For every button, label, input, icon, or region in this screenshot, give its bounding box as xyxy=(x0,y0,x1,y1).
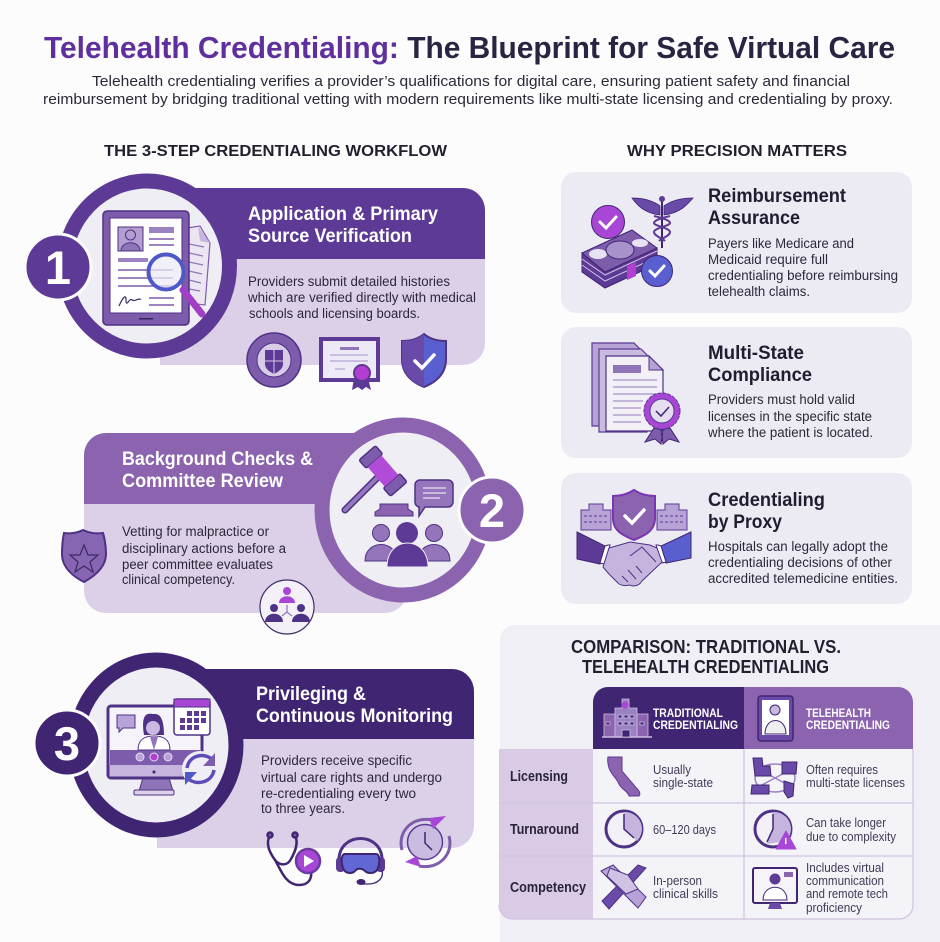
icon: network of people xyxy=(260,580,314,634)
heading: workflow: THE 3-STEP CREDENTIALING WORKFLOW xyxy=(104,143,448,160)
icon: speech bubble xyxy=(415,480,453,516)
heading: Compliance xyxy=(708,364,812,386)
cell: includes virtual: Includes virtual xyxy=(806,861,884,875)
step 3 ring xyxy=(76,660,236,830)
description: telehealth claims. xyxy=(708,284,810,299)
step 1 number: 1 xyxy=(45,241,71,294)
heading xyxy=(708,342,812,386)
cell: single state: Usually xyxy=(653,763,692,777)
step 2 text: disciplinary actions before a xyxy=(122,541,286,556)
table rows background xyxy=(593,749,913,919)
icon: shield, hospitals and handshake xyxy=(577,490,691,586)
traditional header xyxy=(593,687,744,749)
step 3 text: Providers receive specific xyxy=(261,753,412,768)
comparison heading xyxy=(571,637,841,677)
step 1 heading xyxy=(248,203,438,247)
heading xyxy=(708,489,825,533)
cell: multi-state xyxy=(806,763,905,790)
icon: monitor with doctor and calendar xyxy=(108,699,210,795)
panel: step 3 xyxy=(34,660,474,885)
step 3 text: re-credentialing every two xyxy=(261,786,416,801)
step 3 text: virtual care rights and undergo xyxy=(261,770,442,785)
icon: clock xyxy=(606,811,642,847)
card background xyxy=(561,473,912,604)
panel: step 1 xyxy=(25,181,485,390)
description: credentialing before reimbursing xyxy=(708,268,898,283)
step 1 body background xyxy=(160,259,485,365)
step 1 number xyxy=(25,234,91,300)
step 3 body background xyxy=(157,739,474,848)
step 3 text: to three years. xyxy=(261,801,345,816)
heading xyxy=(708,185,846,229)
description: Payers like Medicare and xyxy=(708,236,854,251)
cell: can take longer xyxy=(806,816,897,844)
description: Providers must hold valid xyxy=(708,392,855,407)
heading: why precision matters: WHY PRECISION MATTERS xyxy=(627,143,847,160)
icon: connected states xyxy=(751,758,797,798)
icon: stethoscope with play xyxy=(268,832,320,885)
panel: reimbursement assurance xyxy=(561,172,912,313)
icon: clock with cycle arrows xyxy=(401,816,450,867)
step 1 ring xyxy=(64,181,230,351)
cell: includes virtual: communication xyxy=(806,874,884,888)
heading: Reimbursement xyxy=(708,185,846,207)
step 2 heading: Committee Review xyxy=(122,470,284,492)
panel: credentialing by proxy xyxy=(561,473,912,604)
icon: gavel xyxy=(345,446,413,516)
heading: Assurance xyxy=(708,207,800,229)
card background xyxy=(561,327,912,458)
icon: clock with warning xyxy=(755,811,796,849)
step 2 heading xyxy=(122,448,313,492)
step 1 heading: Source Verification xyxy=(248,225,412,247)
traditional header: CREDENTIALING xyxy=(653,718,738,732)
title: Telehealth Credentialing: The Blueprint for Safe Virtual Care xyxy=(44,30,895,65)
step 1 header background xyxy=(140,188,485,259)
step 3 number: 3 xyxy=(54,717,80,770)
step 1 text: schools and licensing boards. xyxy=(249,306,420,321)
icon: tablet doctor xyxy=(758,696,793,741)
cell: can take longer: due to complexity xyxy=(806,830,897,844)
description xyxy=(708,539,898,586)
comparison heading: COMPARISON: TRADITIONAL VS. xyxy=(571,637,841,657)
icon: monitor with doctor xyxy=(753,868,797,909)
step 2 text xyxy=(122,524,286,587)
comparison heading: TELEHEALTH CREDENTIALING xyxy=(582,657,829,677)
description: credentialing decisions of other xyxy=(708,555,892,570)
cell: in-person xyxy=(653,874,718,901)
row label: competency: Competency xyxy=(510,880,586,896)
cell: includes virtual: proficiency xyxy=(806,901,863,915)
step 3 text xyxy=(261,753,442,816)
step 1 heading: Application & Primary xyxy=(248,203,438,225)
cell: includes virtual: and remote tech xyxy=(806,887,888,901)
row label: licensing: Licensing xyxy=(510,769,568,785)
description: Medicaid require full xyxy=(708,252,828,267)
step 2 text: peer committee evaluates xyxy=(122,557,273,572)
step 2 number xyxy=(459,477,525,543)
step 3 header background xyxy=(150,669,474,739)
step 3 heading: Continuous Monitoring xyxy=(256,705,453,727)
traditional header: TRADITIONAL xyxy=(653,706,723,720)
cell: multi-state: multi-state licenses xyxy=(806,776,905,790)
subtitle xyxy=(43,73,893,108)
icon: hospital xyxy=(602,699,652,737)
heading: Credentialing xyxy=(708,489,825,511)
step 1 text xyxy=(247,274,476,321)
step 2 heading: Background Checks & xyxy=(122,448,313,470)
description: accredited telemedicine entities. xyxy=(708,571,898,586)
row label column xyxy=(499,749,593,919)
step 3 heading xyxy=(256,683,453,727)
subtitle: Telehealth credentialing verifies a provider’s qualifications for digital care, ensuring patient safety and financial xyxy=(92,73,850,90)
comparison background xyxy=(500,625,940,942)
icon: VR headset xyxy=(336,838,385,885)
step 1 text: which are verified directly with medical xyxy=(247,290,476,305)
description xyxy=(708,236,898,299)
step 3 number xyxy=(34,710,100,776)
step 3 heading: Privileging & xyxy=(256,683,366,705)
step 2 header background xyxy=(84,433,380,504)
cell: includes virtual xyxy=(806,861,888,915)
telehealth header: TELEHEALTH xyxy=(806,706,871,720)
icon: refresh arrows xyxy=(182,751,218,787)
table xyxy=(499,687,913,919)
description: Hospitals can legally adopt the xyxy=(708,539,888,554)
step 2 text: clinical competency. xyxy=(122,572,235,587)
cell: multi-state: Often requires xyxy=(806,763,878,777)
row label: turnaround: Turnaround xyxy=(510,822,579,838)
icon: badge xyxy=(62,530,106,582)
telehealth header xyxy=(744,687,913,749)
description: where the patient is located. xyxy=(707,425,873,440)
icon: university seal xyxy=(247,333,301,387)
heading: Multi-State xyxy=(708,342,804,364)
step 2 body background xyxy=(84,504,407,613)
subtitle: reimbursement by bridging traditional vetting with modern requirements like multi-state licensing and credentialing by proxy. xyxy=(43,91,893,108)
telehealth header: CREDENTIALING xyxy=(806,718,890,732)
panel: comparison xyxy=(499,625,940,942)
icon: documents with ribbon xyxy=(592,343,680,444)
panel: multi-state compliance xyxy=(561,327,912,458)
step 2 ring xyxy=(322,425,484,595)
icon: joined hands xyxy=(601,865,646,909)
panel: step 2 xyxy=(62,425,525,634)
description: licenses in the specific state xyxy=(708,409,872,424)
cell: in-person: In-person xyxy=(653,874,702,888)
heading: by Proxy xyxy=(708,511,782,533)
icon: single state xyxy=(608,757,640,796)
cell: single state: single-state xyxy=(653,776,713,790)
step 1 text: Providers submit detailed histories xyxy=(248,274,450,289)
step 2 text: Vetting for malpractice or xyxy=(122,524,269,539)
icon: tablet application with magnifier xyxy=(103,211,210,325)
icon: shield xyxy=(402,334,446,387)
icon: committee xyxy=(365,522,450,567)
description xyxy=(707,392,873,440)
cell: can take longer: Can take longer xyxy=(806,816,886,830)
icon: money and caduceus xyxy=(582,196,693,288)
card background xyxy=(561,172,912,313)
cell: in-person: clinical skills xyxy=(653,887,718,901)
icon: certificate xyxy=(321,339,378,390)
step 2 number: 2 xyxy=(479,484,505,537)
cell: single state xyxy=(653,763,713,790)
cell: 60-120 days: 60–120 days xyxy=(653,823,716,837)
